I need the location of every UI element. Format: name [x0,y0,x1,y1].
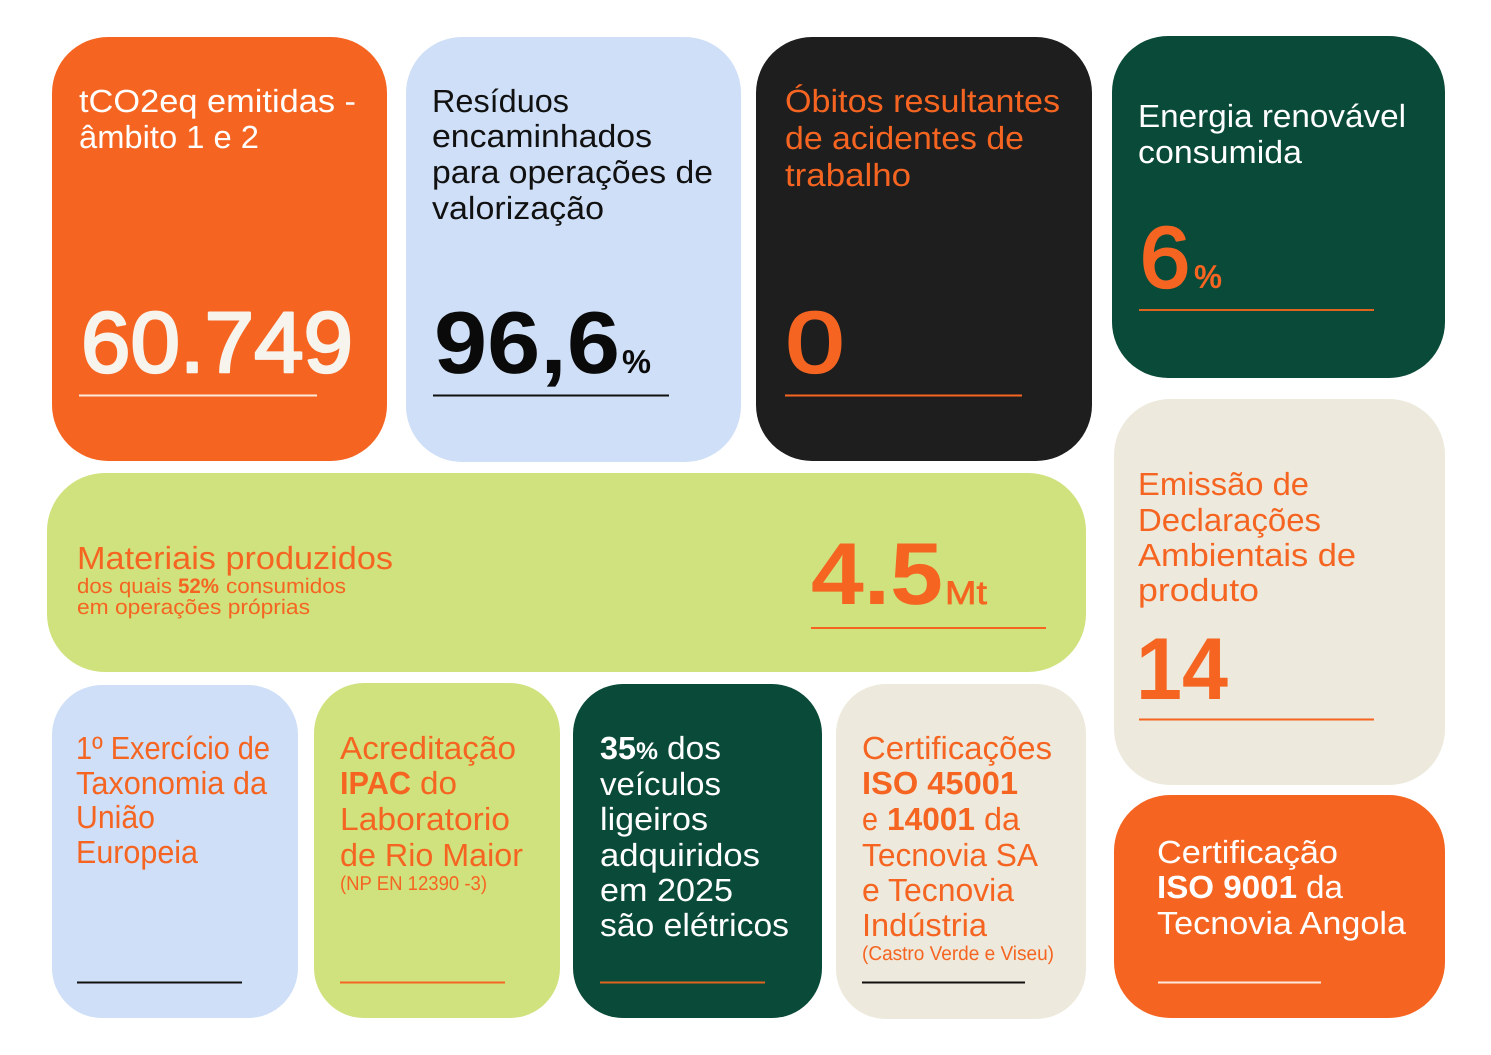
label: certificações ISO: (Castro Verde e Viseu) [862,943,1054,965]
label: resíduos encaminhados: valorização [432,190,604,226]
panel: resíduos encaminhados [406,37,741,462]
panel: acreditação IPAC [314,683,560,1018]
label: acreditação IPAC: (NP EN 12390 -3) [340,873,487,895]
label: certificações ISO: Certificações [862,730,1052,766]
label: veículos elétricos: 35 [600,730,636,766]
value: 96,6%: % [622,343,651,380]
label: certificação ISO 9001: Tecnovia Angola [1157,905,1406,941]
panel: declarações ambientais [1114,399,1445,785]
label: certificações ISO [862,730,1054,965]
value: 96,6%: 96,6 [434,293,620,392]
value: 6%: 6 [1140,210,1190,306]
label: certificação ISO 9001 [1157,834,1406,941]
panel: materiais produzidos [47,473,1086,672]
label: certificações ISO: e [862,801,878,837]
label: materiais produzidos: Materiais produzidos [77,540,393,576]
label: veículos elétricos: em 2025 [600,872,733,908]
label: taxonomia [76,730,270,870]
label: veículos elétricos: dos [667,730,721,766]
label: certificação ISO 9001: Certificação [1157,834,1338,870]
label: declarações ambientais: produto [1138,572,1259,608]
label: materiais produzidos: consumidos [226,575,346,598]
label: veículos elétricos: % [636,738,658,765]
value: 14: 14 [1136,619,1228,718]
label: acreditação IPAC: Laboratorio [340,801,510,837]
panel: taxonomia [52,685,298,1018]
panel: certificação ISO 9001 [1114,795,1445,1018]
label: veículos elétricos: veículos [600,766,721,802]
panel: óbitos [756,37,1092,461]
label: declarações ambientais [1138,466,1356,608]
value: 6%: % [1194,258,1222,295]
panel: certificações ISO [836,684,1086,1019]
label: acreditação IPAC: Acreditação [340,730,516,766]
label: veículos elétricos: ligeiros [600,801,708,837]
label: resíduos encaminhados [432,83,713,226]
label: resíduos encaminhados: para operações de [432,154,713,190]
label: certificações ISO: e Tecnovia [862,872,1014,908]
label: certificações ISO: ISO 45001 [862,765,1018,801]
label: certificações ISO: 14001 [887,801,975,837]
label: óbitos resultantes: trabalho [785,157,911,193]
label: taxonomia: 1º Exercício de [76,730,270,766]
value: 0: 0 [786,295,844,391]
label: acreditação IPAC: de Rio Maior [340,837,523,873]
panel: energia renovável [1112,36,1445,378]
label: declarações ambientais: Declarações [1138,502,1321,538]
label: materiais produzidos: em operações próprias [77,596,310,619]
value: 4.5 Mt: Mt [945,574,987,611]
label: acreditação IPAC: do [420,765,457,801]
label: energia renovável: consumida [1138,134,1302,170]
panel: veículos elétricos [573,684,822,1018]
label: acreditação IPAC: IPAC [340,765,411,801]
label: resíduos encaminhados: encaminhados [432,118,652,154]
label: veículos elétricos: são elétricos [600,907,789,943]
value: 4.5 Mt: 4.5 [811,524,943,623]
label: óbitos resultantes: de acidentes de [785,120,1024,156]
label: certificações ISO: da [984,801,1020,837]
label: óbitos resultantes [785,83,1060,193]
value: 6% [1140,210,1222,306]
label: taxonomia: Europeia [76,834,198,870]
label: declarações ambientais: Ambientais de [1138,537,1356,573]
label: óbitos resultantes: Óbitos resultantes [785,83,1060,119]
label: certificações ISO: Tecnovia SA [862,837,1039,873]
label: energia renovável [1138,98,1406,170]
label: tCO2eq emitidas [79,83,356,155]
label: taxonomia: Taxonomia da [76,765,267,801]
panel: tCO2eq emitidas [52,37,387,461]
label: certificação ISO 9001: da [1306,869,1343,905]
label: materiais produzidos [77,540,393,619]
label: taxonomia: União [76,799,155,835]
label: tCO2eq emitidas: tCO2eq emitidas - [79,83,356,119]
label: certificação ISO 9001: ISO 9001 [1157,869,1297,905]
label: declarações ambientais: Emissão de [1138,466,1309,502]
label: resíduos encaminhados: Resíduos [432,83,569,119]
label: materiais produzidos: 52% [178,575,219,598]
value: 4.5 Mt [811,524,987,623]
label: veículos elétricos [600,730,789,943]
label: certificações ISO: Indústria [862,907,987,943]
label: materiais produzidos: dos quais [77,575,172,598]
label: veículos elétricos: adquiridos [600,837,760,873]
value: 60.749: 60.749 [81,295,353,391]
label: tCO2eq emitidas: âmbito 1 e 2 [79,119,259,155]
label: acreditação IPAC [340,730,523,895]
label: energia renovável: Energia renovável [1138,98,1406,134]
